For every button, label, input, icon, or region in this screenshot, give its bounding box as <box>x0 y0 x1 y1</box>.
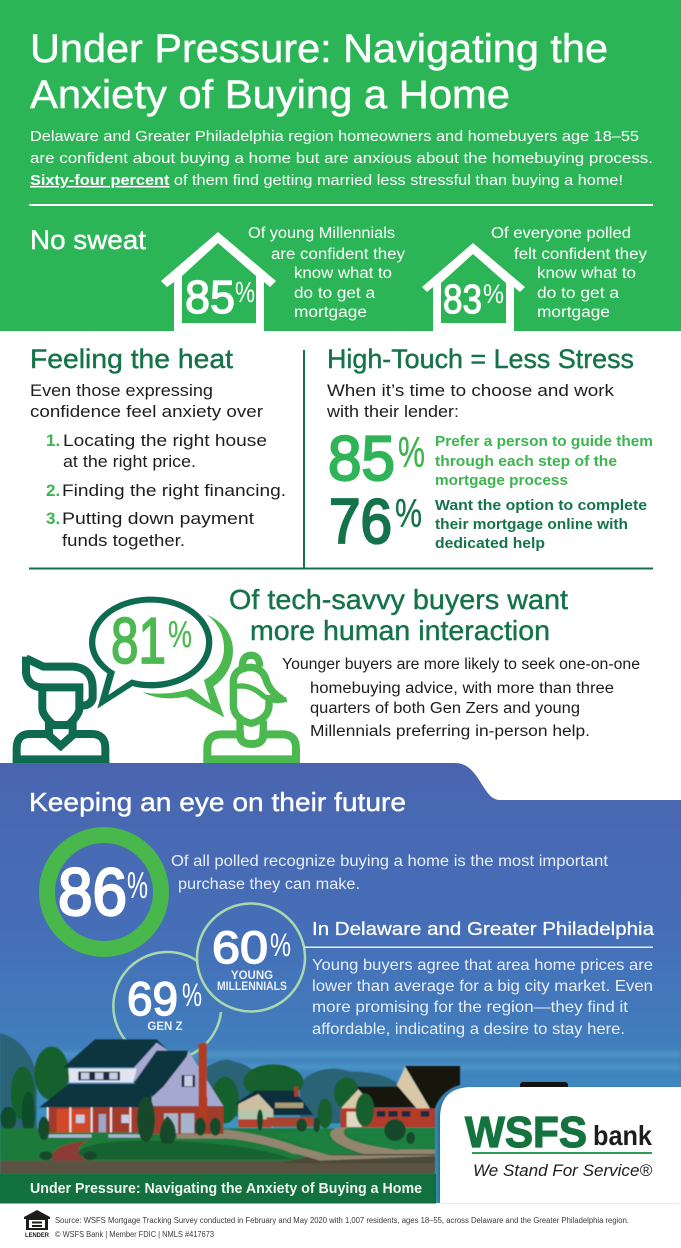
text: younger buyers: quarters of both Gen Zers and young <box>310 700 580 717</box>
intro text <box>30 381 263 421</box>
source text: © WSFS Bank | Member FDIC | NMLS #417673 <box>55 1230 215 1239</box>
logo: WSFS bank: bank <box>593 1120 652 1151</box>
stat: 76% <box>329 487 647 557</box>
text: young Millennials: mortgage <box>294 304 367 321</box>
icon: equal housing lender: LENDER <box>25 1233 50 1239</box>
numbered list: 1. <box>46 431 60 450</box>
title <box>30 27 608 117</box>
stat: 76%: % <box>395 492 422 536</box>
text: everyone polled: mortgage <box>537 304 610 321</box>
text: young buyers: lower than average for a big city market. Even <box>312 978 653 995</box>
icon: house 85%: % <box>235 277 255 309</box>
numbered list: Finding the right financing. <box>62 481 286 500</box>
heading: tech-savvy: more human interaction <box>250 615 550 646</box>
banner <box>0 1174 436 1204</box>
icon: house 85%: 85 <box>185 271 235 323</box>
text: everyone polled <box>491 225 647 321</box>
numbered list: funds together. <box>62 531 185 550</box>
sky streaks <box>60 1051 681 1070</box>
stat: 86% ring <box>47 835 161 949</box>
intro paragraph: Sixty-four percent of them find getting married less stressful than buying a home! <box>30 172 623 189</box>
main house <box>38 1039 223 1160</box>
heading: In Delaware: In Delaware and Greater Philadelphia <box>312 919 655 939</box>
stat: 60% young Millennials <box>197 904 305 1012</box>
intro text: confidence feel anxiety over <box>30 402 263 421</box>
heading: Keeping an eye: Keeping an eye on their future <box>29 787 406 817</box>
text: young Millennials: Of young Millennials <box>248 225 395 242</box>
text: young buyers: affordable, indicating a desire to stay here. <box>312 1021 625 1038</box>
ground <box>0 1128 435 1163</box>
text: everyone polled: Of everyone polled <box>491 225 631 242</box>
numbered list: 2. <box>46 481 60 500</box>
text: younger buyers: Millennials preferring in-person help. <box>310 723 590 740</box>
illustration: neighborhood <box>0 1033 460 1174</box>
numbered list: Locating the right house <box>63 431 267 450</box>
logo: WSFS bank <box>465 1108 652 1180</box>
stat: 69% Gen Z: % <box>182 977 202 1013</box>
numbered list: 3. <box>46 509 60 528</box>
text: young buyers: Young buyers agree that area home prices are <box>312 957 653 974</box>
stat: 69% Gen Z: 69 <box>127 972 178 1025</box>
panel: keeping an eye on their future <box>0 763 681 1204</box>
stat: 81%: 81 <box>111 604 166 677</box>
text: young buyers <box>312 957 653 1038</box>
intro paragraph: are confident about buying a home but are anxious about the homebuying process. <box>30 150 653 167</box>
stat: 81%: % <box>168 614 192 656</box>
icon: house 85% <box>161 232 276 331</box>
icon: house 83%: 83 <box>443 276 482 322</box>
logo: WSFS bank: WSFS <box>465 1108 587 1157</box>
panel: tech-savvy <box>13 584 640 762</box>
numbered list: at the right price. <box>63 452 196 471</box>
panel: feeling the heat <box>30 344 286 550</box>
text: everyone polled: know what to <box>537 265 636 282</box>
intro paragraph: Delaware and Greater Philadelphia region homeowners and homebuyers age 18–55 <box>30 128 639 145</box>
trees back <box>0 1033 400 1130</box>
banner: Under Pressure: Navigating the Anxiety of Buying a Home <box>30 1181 422 1197</box>
stat: 76%: Want the option to complete <box>435 498 647 514</box>
stat: 85%: mortgage process <box>435 473 568 489</box>
icon: house 83%: % <box>483 279 504 309</box>
numbered list: Putting down payment <box>62 509 254 528</box>
icon: equal housing lender <box>24 1210 50 1239</box>
stat: 76%: 76 <box>329 487 392 557</box>
stat: 60% young Millennials: 60 <box>212 922 268 973</box>
text: all polled: purchase they can make. <box>178 876 360 893</box>
middle house <box>235 1087 320 1132</box>
panel: green header <box>0 0 681 331</box>
stat: 85%: % <box>398 429 425 477</box>
stat: 60% young Millennials: % <box>270 927 291 963</box>
text: everyone polled: felt confident they <box>514 246 647 263</box>
right house <box>341 1066 460 1144</box>
stat: 60% young Millennials: YOUNG <box>231 970 273 982</box>
heading: Feeling the heat: Feeling the heat <box>30 344 234 374</box>
text: everyone polled: do to get a <box>537 285 619 302</box>
icon: man <box>13 657 109 762</box>
stat: 76%: their mortgage online with <box>435 517 628 533</box>
stat: 85%: Prefer a person to guide them <box>435 434 653 450</box>
stat: 86% ring: % <box>127 865 148 906</box>
stat: 60% young Millennials: MILLENNIALS <box>217 981 287 993</box>
intro paragraph <box>30 128 653 189</box>
text: all polled: Of all polled recognize buying a home is the most important <box>171 853 609 870</box>
icon: dark speech bubble <box>89 597 212 709</box>
numbered list <box>46 431 286 550</box>
text: younger buyers: Younger buyers are more likely to seek one-on-one <box>282 656 640 673</box>
sky background <box>0 763 681 1203</box>
stat: 85%: 85 <box>328 424 395 494</box>
logo panel <box>0 1082 681 1248</box>
panel: footer <box>24 1210 629 1239</box>
intro text: Even those expressing <box>30 381 213 400</box>
intro text: with their lender: <box>326 402 459 421</box>
icon: light speech bubble <box>143 615 233 717</box>
stat: 85% <box>328 424 653 494</box>
stat: 85%: through each step of the <box>435 454 617 470</box>
heading: High-Touch: High-Touch = Less Stress <box>327 344 634 374</box>
text: young buyers: more promising for the region—they find it <box>312 999 629 1016</box>
heading: No sweat: No sweat <box>30 225 146 255</box>
text: younger buyers <box>282 656 640 740</box>
stat: 76%: dedicated help <box>435 536 545 552</box>
panel: high-touch <box>326 344 653 557</box>
source text <box>55 1216 629 1239</box>
text: younger buyers: homebuying advice, with more than three <box>310 680 614 697</box>
intro text: When it’s time to choose and work <box>327 381 615 400</box>
icon: woman <box>203 655 300 762</box>
logo: WSFS bank: We Stand For Service® <box>473 1161 652 1180</box>
text: young Millennials: know what to <box>294 265 392 282</box>
text: all polled <box>171 853 609 893</box>
icon: house 83% <box>422 243 525 331</box>
stat: 86% ring: 86 <box>58 855 127 930</box>
text: young Millennials <box>248 225 405 321</box>
stat: 69% Gen Z: GEN Z <box>147 1021 183 1033</box>
source text: Source: WSFS Mortgage Tracking Survey conducted in February and May 2020 with 1,007 residents, ages 18–55, across Delaware and the Greater Philadelphia region. <box>55 1216 629 1225</box>
text: young Millennials: do to get a <box>294 285 375 302</box>
intro text <box>326 381 615 421</box>
stat: 69% Gen Z <box>113 952 221 1060</box>
title: Under Pressure: Navigating the <box>30 27 608 71</box>
heading: tech-savvy <box>229 584 568 646</box>
heading: tech-savvy: Of tech-savvy buyers want <box>229 584 568 615</box>
title: Anxiety of Buying a Home <box>30 73 510 117</box>
text: young Millennials: are confident they <box>271 246 405 263</box>
